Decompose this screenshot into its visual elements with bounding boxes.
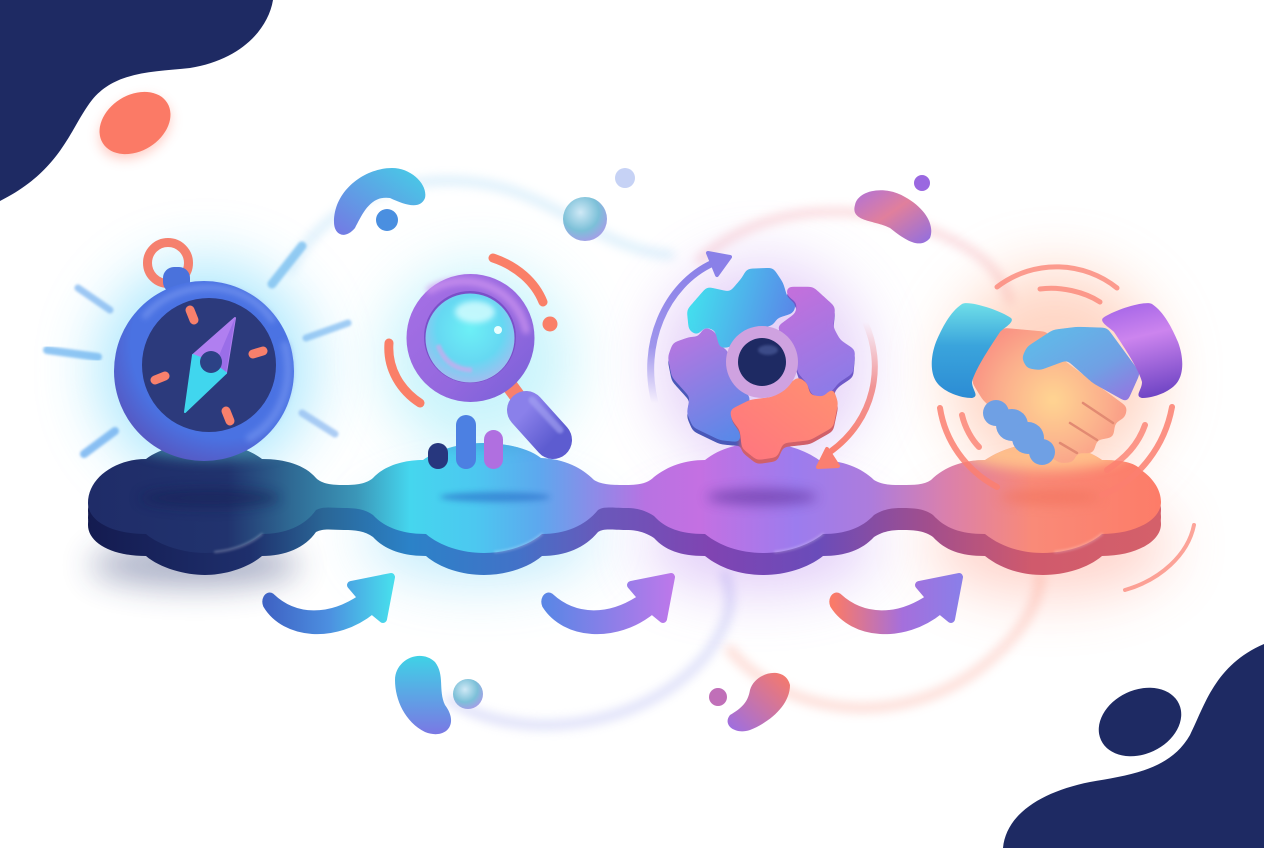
decorative dot: blue xyxy=(376,209,398,231)
knuckles xyxy=(983,400,1055,465)
decorative blob: top blue swoosh xyxy=(334,168,425,235)
left sleeve xyxy=(932,303,1012,398)
flow arrow 2 xyxy=(545,577,671,630)
arcs above and around xyxy=(940,267,1194,590)
decorative bubble: small xyxy=(615,168,635,188)
gear piece shadows xyxy=(668,291,855,464)
orbit arcs xyxy=(493,258,543,302)
corner blob: top left xyxy=(0,0,273,201)
decorative bubble: bottom xyxy=(453,679,483,709)
rotation arc top xyxy=(651,263,713,403)
gear piece: coral xyxy=(730,377,838,460)
decorative bubble: large xyxy=(563,197,607,241)
decorative dot: purple xyxy=(914,175,930,191)
peach hand xyxy=(972,328,1127,463)
icon: puzzle gear xyxy=(651,253,875,467)
handle xyxy=(526,410,553,440)
glows behind icons xyxy=(90,260,1170,595)
icon: magnifying glass xyxy=(389,258,560,469)
compass loop xyxy=(148,242,188,284)
rotation arc bottom xyxy=(830,322,875,452)
decorative dot: coral xyxy=(709,688,727,706)
flow arrow 3 xyxy=(833,577,959,630)
gear piece: left purple xyxy=(668,327,750,442)
connector xyxy=(503,381,530,409)
gear hub xyxy=(726,326,798,398)
decorative blob: purple top right xyxy=(854,190,931,243)
icon: handshake xyxy=(932,267,1194,590)
blue hand xyxy=(1022,327,1140,402)
navy oval: bottom right xyxy=(1088,675,1192,769)
glass xyxy=(406,274,534,402)
decorative blob: coral bottom xyxy=(728,673,790,731)
bar chart xyxy=(428,415,503,469)
right sleeve xyxy=(1102,303,1182,398)
compass needle xyxy=(185,318,235,412)
gear piece: right purple xyxy=(777,287,855,397)
icon: compass xyxy=(47,242,348,461)
decorative blob: cyan bottom xyxy=(395,656,451,734)
finger creases xyxy=(1060,403,1113,453)
compass body xyxy=(114,281,294,461)
coral oval: top left xyxy=(88,79,182,171)
platform: connected cloud path xyxy=(88,443,1161,575)
connecting swirl lines xyxy=(290,181,1040,725)
flow arrow 1 xyxy=(266,577,391,630)
corner blob: bottom right xyxy=(1003,644,1264,848)
compass rays xyxy=(47,246,348,454)
gear piece: cyan xyxy=(687,268,796,348)
